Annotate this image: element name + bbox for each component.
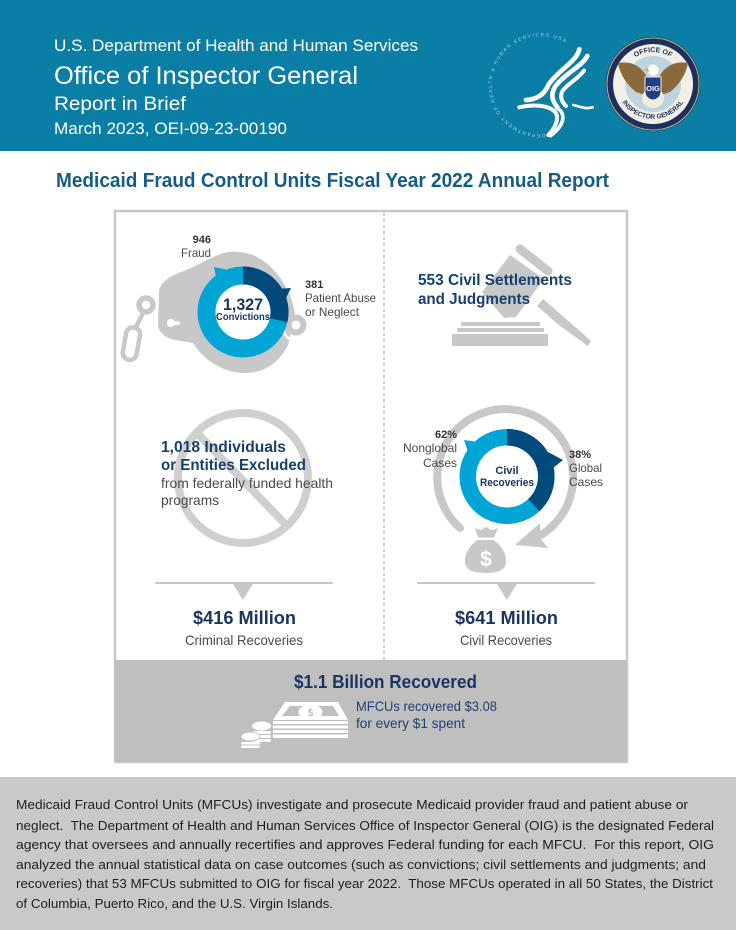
- panel: civil recoveries total: $641 Million: [455, 608, 558, 628]
- label: nonglobal share: [403, 429, 457, 470]
- header: report type: Report in Brief: [54, 94, 187, 115]
- label: global share: [569, 449, 603, 489]
- donut chart: civil recoveries: Recoveries: [480, 477, 534, 489]
- return on spending text: MFCUs recovered $3.08: [356, 698, 497, 714]
- footer text: neglect. The Department of Health and Human Services Office of Inspector General (OIG) is the designated Federal: [16, 818, 714, 833]
- panel: exclusions: [161, 413, 333, 543]
- exclusions text: or Entities Excluded: [161, 457, 306, 474]
- label: fraud count: Fraud: [181, 246, 211, 260]
- return on spending text: for every $1 spent: [356, 715, 465, 731]
- label: patient abuse count: or Neglect: [305, 305, 360, 319]
- donut total: 1,327: [223, 295, 263, 314]
- settlements text: 553 Civil Settlements: [418, 272, 572, 289]
- header banner: [0, 0, 736, 151]
- label: fraud count: [181, 234, 211, 260]
- footer text: agency that oversees and annually recertifies and approves Federal funding for each MFCU. For this report, OIG: [16, 837, 714, 852]
- icon: OIG seal: OIG: [646, 84, 660, 93]
- footer text: of Columbia, Puerto Rico, and the U.S. Virgin Islands.: [16, 896, 333, 911]
- panel: criminal recoveries: [155, 583, 333, 648]
- icon: OIG seal: INSPECTOR GENERAL: [622, 100, 684, 119]
- panel: convictions: [122, 234, 376, 373]
- return on spending text: [356, 698, 497, 731]
- footer text: recoveries) that 53 MFCUs submitted to OIG for fiscal year 2022. Those MFCUs operated in all 50 States, the District: [16, 876, 713, 891]
- icon: money stack and coins: $: [308, 708, 314, 719]
- label: patient abuse count: [305, 279, 376, 319]
- title: Medicaid Fraud Control Units Fiscal Year 2022 Annual Report: [56, 170, 609, 192]
- icon: money bag: $: [480, 548, 492, 571]
- icon: gavel: [452, 249, 591, 346]
- label: patient abuse count: Patient Abuse: [305, 291, 376, 305]
- panel: civil settlements: [418, 249, 591, 346]
- icon: OIG seal: [606, 37, 700, 131]
- panel: criminal recoveries: Criminal Recoveries: [185, 632, 303, 648]
- panel: criminal recoveries: $416 Million: [193, 608, 296, 628]
- label: nonglobal share: 62%: [435, 429, 457, 441]
- footer description panel: [0, 777, 736, 930]
- donut caption: Civil: [495, 465, 519, 477]
- icon: handcuff: [122, 252, 306, 373]
- footer text: Medicaid Fraud Control Units (MFCUs) investigate and prosecute Medicaid provider fraud and patient abuse or: [16, 797, 689, 812]
- panel: civil recoveries donut: [403, 409, 603, 573]
- exclusions text: from federally funded health: [161, 475, 333, 491]
- donut caption: Convictions: [216, 311, 270, 323]
- icon: prohibition sign: [178, 413, 308, 543]
- donut chart: convictions: [206, 267, 291, 348]
- arrow: circular gray arrow: [437, 409, 573, 548]
- panel: civil recoveries total: Civil Recoveries: [460, 632, 552, 648]
- exclusions text: 1,018 Individuals: [161, 439, 286, 456]
- panel: civil recoveries total: [417, 583, 595, 648]
- exclusions text: [161, 439, 333, 508]
- label: patient abuse count: 381: [305, 279, 323, 291]
- panel: total recovered: [115, 660, 627, 762]
- icon: money stack and coins: [241, 702, 348, 748]
- icon: HHS logo: DEPARTMENT OF HEALTH & HUMAN SERVICES USA: [488, 32, 566, 138]
- label: global share: Cases: [569, 475, 603, 489]
- label: global share: 38%: [569, 449, 591, 461]
- exclusions text: programs: [161, 492, 219, 508]
- main infographic frame: [115, 211, 627, 762]
- icon: money bag: [465, 527, 506, 573]
- icon: OIG seal: OFFICE OF: [634, 47, 673, 56]
- label: fraud count: 946: [193, 234, 211, 246]
- settlements text: and Judgments: [418, 291, 530, 308]
- header: report date and number: March 2023, OEI-09-23-00190: [54, 120, 287, 138]
- donut chart: civil recoveries: [464, 437, 563, 516]
- label: nonglobal share: Cases: [423, 456, 457, 470]
- label: global share: Global: [569, 461, 602, 475]
- label: nonglobal share: Nonglobal: [403, 441, 457, 455]
- header: office name: Office of Inspector General: [54, 62, 358, 90]
- total heading: $1.1 Billion Recovered: [294, 672, 477, 692]
- footer text: [16, 797, 714, 911]
- header: department name: U.S. Department of Health and Human Services: [54, 36, 418, 55]
- settlements text: [418, 272, 572, 308]
- footer text: analyzed the annual statistical data on case outcomes (such as convictions; civil settlements and judgments; and: [16, 857, 706, 872]
